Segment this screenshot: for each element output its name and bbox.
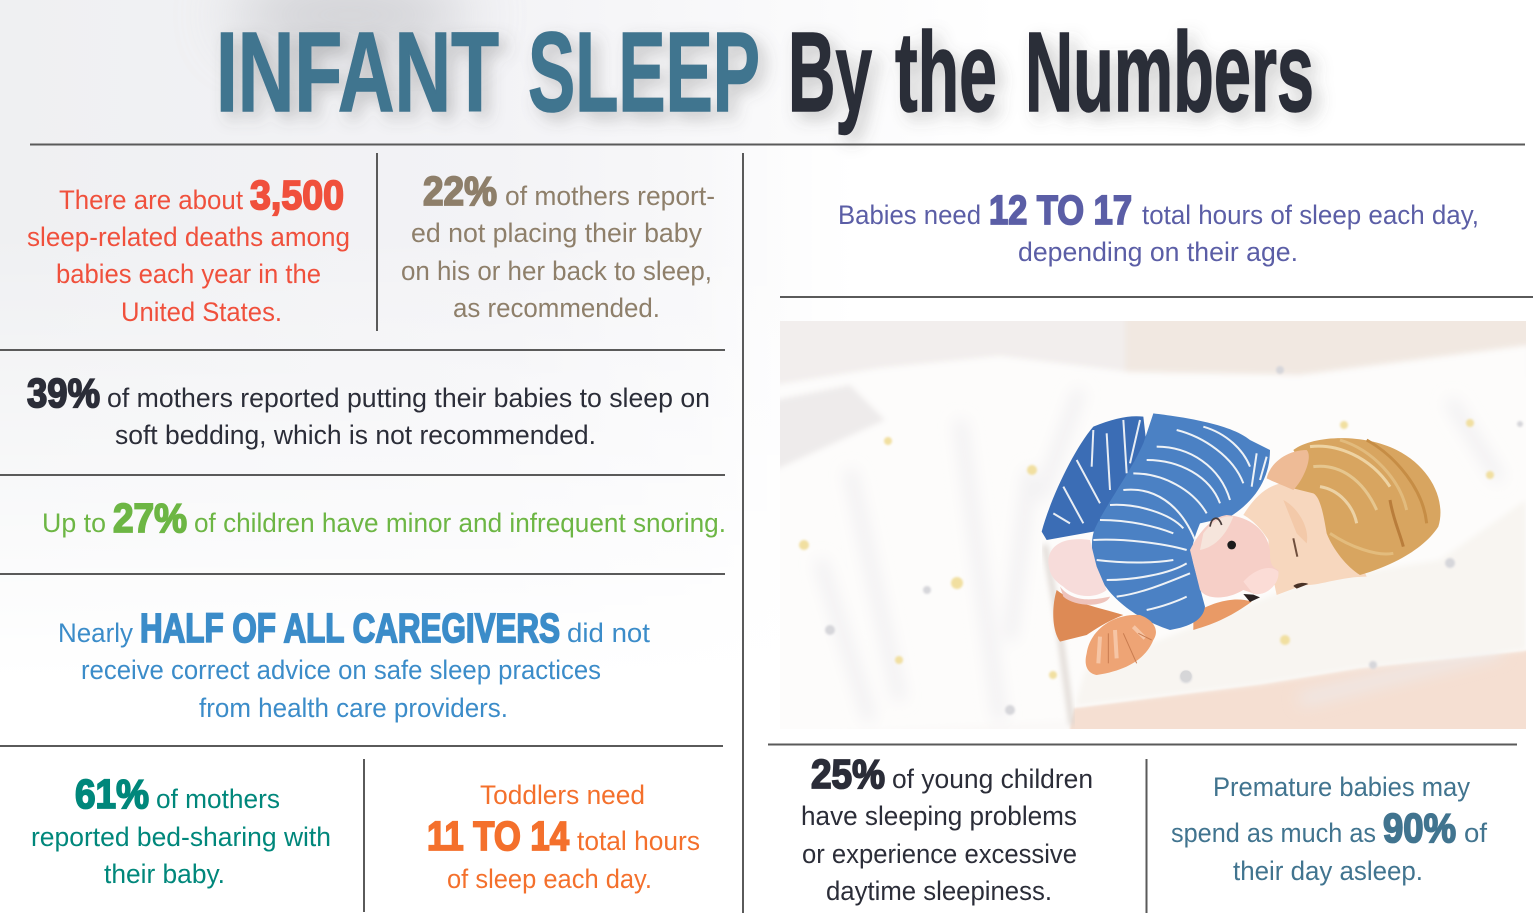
torso xyxy=(1042,416,1157,540)
stat: toddlers 11 to 14 hours: of sleep each day. xyxy=(447,864,652,894)
stat: 61% bed-sharing: of mothers xyxy=(156,784,280,814)
stat: 25% sleeping problems: 25% xyxy=(811,751,885,797)
stat: 25% sleeping problems: daytime sleepiness. xyxy=(826,876,1052,906)
stat: premature babies 90% xyxy=(1171,772,1487,886)
title: the xyxy=(895,9,997,135)
stat: babies 12 to 17 hours: depending on their age. xyxy=(1018,237,1298,267)
stars xyxy=(799,366,1523,715)
stat: half of all caregivers xyxy=(58,605,650,723)
stat: 3,500 deaths: sleep-related deaths among xyxy=(27,222,350,252)
stat: toddlers 11 to 14 hours: total hours xyxy=(577,826,700,856)
stat: half of all caregivers: HALF OF ALL CAREGIVERS xyxy=(140,605,560,651)
stat: 61% bed-sharing: reported bed-sharing with xyxy=(31,822,331,852)
title: By xyxy=(788,9,872,135)
stat: toddlers 11 to 14 hours: 11 TO 14 xyxy=(427,813,569,859)
face xyxy=(1243,483,1367,595)
stat: 27% snoring xyxy=(42,495,726,541)
title xyxy=(216,9,1314,135)
stat: 22% not back to sleep: as recommended. xyxy=(453,293,660,323)
title: SLEEP xyxy=(528,9,760,135)
pillow star xyxy=(1180,670,1192,678)
title: INFANT xyxy=(216,9,499,135)
stat: toddlers 11 to 14 hours xyxy=(427,780,700,894)
stat: 27% snoring: 27% xyxy=(113,495,187,541)
photo: sleeping toddler xyxy=(775,315,1535,735)
child and teddy xyxy=(1042,413,1440,682)
stat: 22% not back to sleep: 22% xyxy=(423,168,497,214)
stat: premature babies 90%: of xyxy=(1464,818,1487,848)
stat: 25% sleeping problems: of young children xyxy=(892,764,1093,794)
pillow under the child xyxy=(1075,500,1526,706)
hand xyxy=(1086,615,1156,675)
stat: premature babies 90%: Premature babies may xyxy=(1213,772,1470,802)
stat: 39% soft bedding: 39% xyxy=(27,370,100,416)
teddy xyxy=(1190,515,1278,597)
stat: 22% not back to sleep: on his or her back to sleep, xyxy=(401,256,712,286)
stat: 3,500 deaths xyxy=(27,172,350,327)
stat: premature babies 90%: their day asleep. xyxy=(1233,856,1423,886)
stat: 25% sleeping problems xyxy=(801,751,1093,906)
stat: 22% not back to sleep xyxy=(401,168,715,323)
stat: 61% bed-sharing xyxy=(31,771,331,889)
stat: 61% bed-sharing: 61% xyxy=(75,771,149,817)
stat: 27% snoring: Up to xyxy=(42,508,106,538)
stat: half of all caregivers: did not xyxy=(567,618,650,648)
stat: babies 12 to 17 hours: Babies need xyxy=(838,200,981,230)
stat: 25% sleeping problems: have sleeping problems xyxy=(801,801,1077,831)
stat: premature babies 90%: spend as much as xyxy=(1171,818,1376,848)
title: Numbers xyxy=(1025,9,1314,135)
hair xyxy=(1293,438,1440,575)
stat: 3,500 deaths: There are about xyxy=(59,185,243,215)
bedding folds xyxy=(1028,482,1492,704)
stat: toddlers 11 to 14 hours: Toddlers need xyxy=(480,780,645,810)
stat: 22% not back to sleep: ed not placing their baby xyxy=(411,218,702,248)
pink foot xyxy=(1060,587,1110,605)
stat: babies 12 to 17 hours: 12 TO 17 xyxy=(989,187,1132,233)
stat: 61% bed-sharing: their baby. xyxy=(104,859,225,889)
lower arm skin xyxy=(1193,599,1252,630)
stat: 3,500 deaths: babies each year in the xyxy=(56,259,321,289)
stat: 3,500 deaths: 3,500 xyxy=(250,172,344,218)
stat: 3,500 deaths: United States. xyxy=(121,297,282,327)
stat: babies 12 to 17 hours xyxy=(838,187,1479,267)
stat: half of all caregivers: from health care providers. xyxy=(199,693,508,723)
ear xyxy=(1267,450,1309,490)
stat: babies 12 to 17 hours: total hours of sleep each day, xyxy=(1142,200,1479,230)
stat: 39% soft bedding: of mothers reported putting their babies to sleep on xyxy=(107,383,710,413)
arm xyxy=(1092,413,1270,630)
stat: 22% not back to sleep: of mothers report- xyxy=(505,181,715,211)
stat: 27% snoring: of children have minor and infrequent snoring. xyxy=(194,508,726,538)
stat: premature babies 90%: 90% xyxy=(1383,805,1456,851)
stat: half of all caregivers: receive correct advice on safe sleep practices xyxy=(81,655,601,685)
leg skin xyxy=(1053,590,1123,642)
stat: 25% sleeping problems: or experience excessive xyxy=(802,839,1077,869)
stat: 39% soft bedding xyxy=(27,370,710,450)
stat: 39% soft bedding: soft bedding, which is not recommended. xyxy=(115,420,596,450)
stat: half of all caregivers: Nearly xyxy=(58,618,133,648)
